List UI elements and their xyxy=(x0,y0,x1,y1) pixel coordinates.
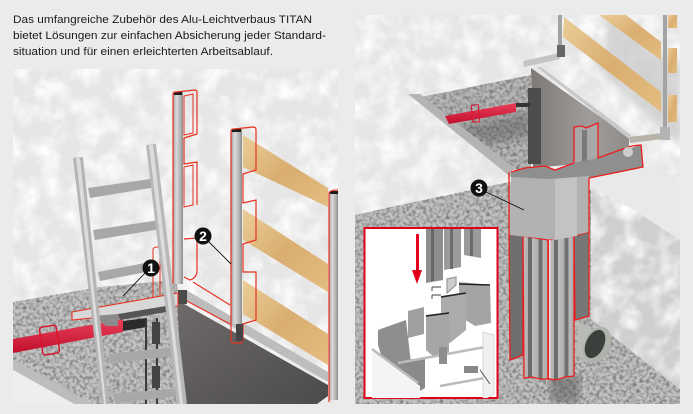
post 2 with hooks xyxy=(231,127,256,343)
corner bracket xyxy=(178,290,187,304)
callout badge 2 xyxy=(194,228,212,244)
falling profiles xyxy=(426,229,481,283)
column tall back profile xyxy=(574,123,598,172)
column top waler xyxy=(511,145,643,180)
pit edge rail xyxy=(182,290,328,382)
concrete ground xyxy=(13,69,338,404)
column shadow xyxy=(550,375,580,403)
callout badge 3: 3 xyxy=(475,180,483,196)
concrete ground xyxy=(355,15,680,212)
front rail xyxy=(408,94,512,178)
vertical wall rails behind ladder xyxy=(145,318,160,404)
pit wall xyxy=(177,300,328,404)
red arrow down xyxy=(412,234,422,284)
wood boards xyxy=(243,135,328,365)
top guardrail posts and rods xyxy=(523,15,670,143)
white box frame xyxy=(372,332,494,398)
wall panel xyxy=(531,68,629,168)
panel: left illustration, ladder access and guardrail xyxy=(13,69,338,404)
intro text xyxy=(13,14,326,58)
assembled profiles xyxy=(378,282,491,398)
callout badge 1: 1 xyxy=(147,260,155,276)
leader line 3 xyxy=(484,191,524,210)
panel: right illustration, corner shoring xyxy=(355,15,680,404)
intro text: situation und für einen erleichterten Arbeitsablauf. xyxy=(13,46,273,58)
top wood boards xyxy=(563,15,677,122)
post 1 with hooks xyxy=(173,90,197,284)
guardrail base outline xyxy=(185,282,230,324)
callout badge 2: 2 xyxy=(199,228,207,244)
leader line 1 xyxy=(123,272,146,296)
waler behind ladder xyxy=(153,247,160,304)
callout badge 3 xyxy=(470,180,488,196)
post 3 at right edge xyxy=(329,190,338,402)
lower gravel surface xyxy=(355,182,680,404)
red prop with clip xyxy=(445,103,530,124)
ladder xyxy=(73,144,187,404)
column lower profiles xyxy=(509,232,589,380)
callout badge 1 xyxy=(142,260,160,276)
red prop with clip xyxy=(13,318,147,355)
board shadows xyxy=(600,15,680,145)
front edge rail xyxy=(13,359,93,404)
leader line 2 xyxy=(208,241,231,264)
ground bottom corner xyxy=(13,370,74,404)
wall top edge xyxy=(537,67,631,139)
gravel behind wall xyxy=(421,75,531,170)
connectors xyxy=(432,277,456,299)
platform bar with outline xyxy=(72,293,178,326)
intro text: Das umfangreiche Zubehör des Alu-Leichtverbaus TITAN xyxy=(13,14,312,26)
right concrete block face xyxy=(591,187,680,389)
prop shadow xyxy=(455,112,530,145)
drain pipe xyxy=(576,321,612,363)
dark wall post xyxy=(528,88,541,164)
gravel pit floor xyxy=(13,280,183,404)
intro text: bietet Lösungen zur einfachen Absicherung jeder Standard- xyxy=(13,30,326,42)
column top collar xyxy=(509,172,589,240)
inset: assembly detail xyxy=(364,228,498,398)
right concrete block top xyxy=(590,166,680,224)
